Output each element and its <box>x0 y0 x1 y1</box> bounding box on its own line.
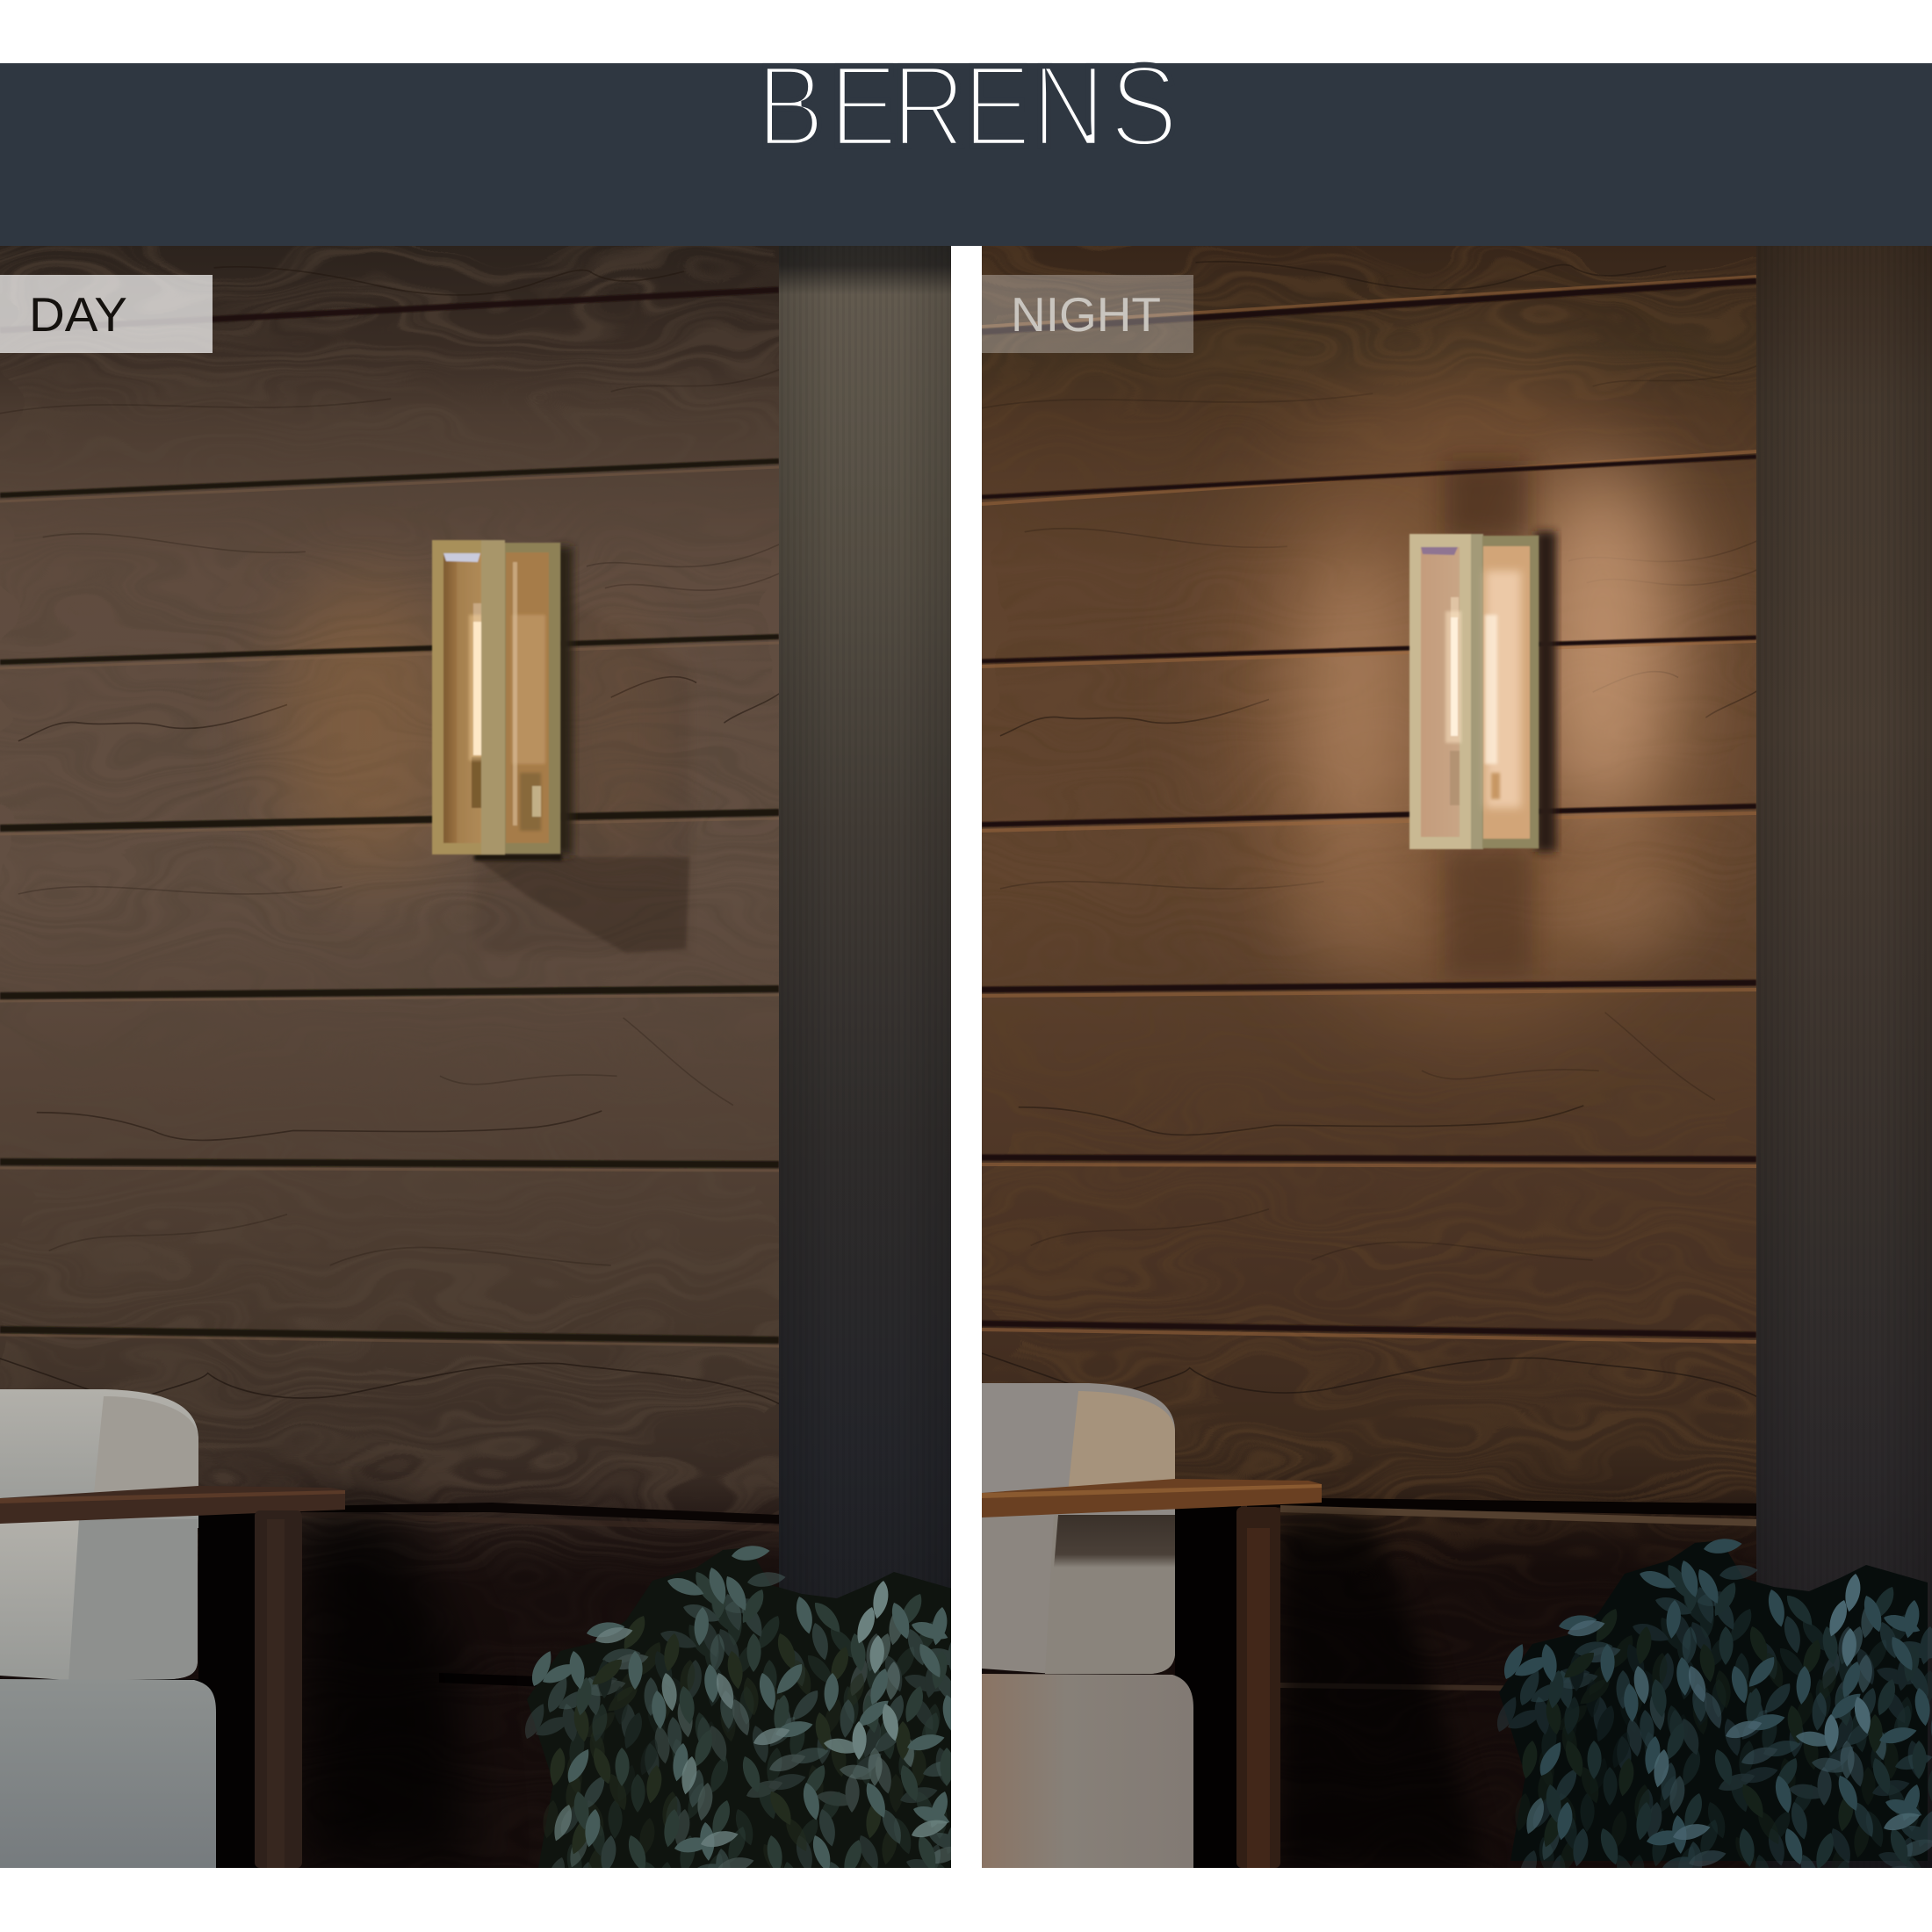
wall sconce, night <box>1409 531 1556 852</box>
side table top and leg, night <box>982 1479 1322 1868</box>
panel: day scene <box>0 246 977 1931</box>
panel: night scene <box>982 246 1932 1924</box>
shrub, night <box>1492 1536 1932 1924</box>
label: DAY <box>0 275 213 353</box>
armchair cushions, night <box>982 1383 1241 1868</box>
dark ribbed column, day <box>779 246 951 1598</box>
label: DAY: DAY <box>29 287 127 342</box>
wood siding wall, night <box>982 246 1772 1868</box>
armchair cushions, day <box>0 1389 260 1868</box>
label: NIGHT: NIGHT <box>1011 287 1161 342</box>
wood siding wall, day <box>0 246 790 1868</box>
label: NIGHT <box>982 275 1193 353</box>
title: BERENS: BERENS <box>757 41 1178 171</box>
shrub, day <box>525 1546 951 1868</box>
ribbed column, night <box>1756 246 1932 1868</box>
side table top and leg, day <box>0 1486 345 1868</box>
wall sconce, day <box>432 540 573 861</box>
header band with title <box>0 41 1932 246</box>
